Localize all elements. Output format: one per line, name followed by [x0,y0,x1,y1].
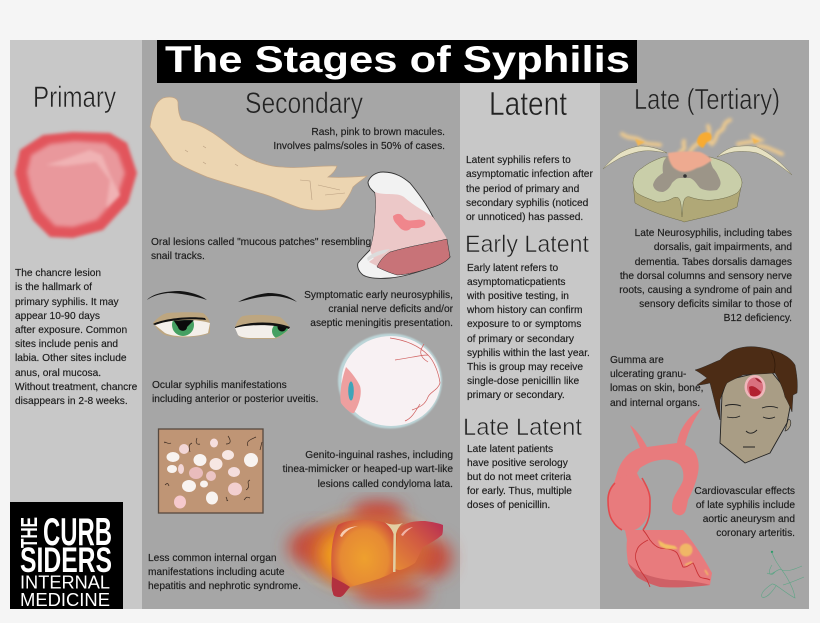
icon: aorta and heart [608,408,712,587]
text: chancre description: Without treatment, chancre [15,382,138,393]
panel: primary background [10,40,142,609]
text: early latent description: asymptomaticpatients [467,277,566,288]
text: chancre description: labia. Other sites include [15,353,127,364]
text: internal organ manifestations: hepatitis and nephrotic syndrome. [148,581,301,592]
text: chancre description [15,268,138,407]
logo: The Curb Siders Internal Medicine: THE [16,517,42,548]
icon: spinal cord with tabes dorsalis [603,120,792,222]
icon: eyes with palsy [147,291,297,339]
text: internal organ manifestations: manifestations including acute [148,567,285,578]
text: genito-inguinal rashes: tinea-mimicker or heaped-up wart-like [283,464,453,475]
text: late neurosyphilis: sensory deficits similar to those of [639,299,792,310]
text: early latent description: single-dose penicillin like [467,376,579,387]
text: late neurosyphilis: dorsalis, gait impairments, and [654,242,792,253]
text: genito-inguinal rashes: Genito-inguinal rashes, including [305,450,453,461]
text: rash: Involves palms/soles in 50% of cases. [273,141,445,152]
text: chancre description: anus, oral mucosa. [15,368,101,379]
text: late neurosyphilis: the dorsal columns and sensory nerve [620,271,792,282]
text: rash: Rash, pink to brown macules. [311,127,445,138]
logo: The Curb Siders Internal Medicine: INTERNAL [20,572,110,592]
text: oral lesions: Oral lesions called "mucous patches" resembling [151,237,371,248]
text: genito-inguinal rashes: lesions called condyloma lata. [318,479,453,490]
right eye [235,315,290,339]
text: latent description: the period of primary and [466,184,580,195]
text: early latent description [466,263,590,401]
text: chancre description: appear 10-90 days [15,311,100,322]
text: late neurosyphilis: B12 deficiency. [724,313,792,324]
heading: early latent: Early Latent [465,231,589,258]
panel: secondary background [142,40,460,609]
left eye [153,312,210,337]
text: genito-inguinal rashes [283,450,453,490]
text: chancre description: is the hallmark of [15,282,92,293]
text: ocular syphilis: Ocular syphilis manifestations [152,380,287,391]
text: gumma [610,355,703,409]
title: The Stages of Syphilis [165,39,630,80]
icon: chancre lesion [15,132,137,238]
logo: The Curb Siders Internal Medicine: CURB [43,511,112,554]
text: early latent description: syphilis within the last year. [467,348,590,359]
text: latent description: asymptomatic infection after [466,169,593,180]
heading: latent: Latent [489,85,567,122]
text: early latent description: This is group may receive [467,362,583,373]
text: internal organ manifestations [148,553,301,592]
text: early latent description: Early latent refers to [467,263,558,274]
text: internal organ manifestations: Less common internal organ [148,553,277,564]
logo: The Curb Siders Internal Medicine: MEDICINE [20,590,110,610]
text: gumma: and internal organs. [610,398,700,409]
text: latent description: secondary syphilis (noticed [466,198,589,209]
text: late neurosyphilis: Late Neurosyphilis, including tabes [635,228,792,239]
text: late neurosyphilis: dementia. Tabes dorsalis damages [635,257,792,268]
heading: late latent: Late Latent [463,414,582,441]
text: gumma: ulcerating granu- [610,369,686,380]
text: neurosyphilis: aseptic meningitis presentation. [310,318,453,329]
text: ocular syphilis: including anterior or posterior uveitis. [152,394,318,405]
text: late neurosyphilis [619,228,792,324]
text: cardiovascular effects: of late syphilis include [696,500,795,511]
text: gumma: lomas on skin, bone, [610,383,703,394]
text: chancre description: The chancre lesion [15,268,101,279]
text: early latent description: whom history can confirm [466,305,582,316]
logo: The Curb Siders Internal Medicine: SIDERS [20,541,112,580]
text: neurosyphilis: Symptomatic early neurosyphilis, [304,290,453,301]
panel: late tertiary background [600,40,809,609]
heading: secondary: Secondary [245,87,363,120]
signature [762,551,804,598]
text: late latent description [467,444,572,511]
text: chancre description: after exposure. Common [15,325,127,336]
text: latent description: or unnoticed) has passed. [466,212,583,223]
text: cardiovascular effects: Cardiovascular effects [694,486,795,497]
text: chancre description: sites include penis and [15,339,118,350]
icon: skin with condyloma lata [158,429,263,513]
text: ocular syphilis [152,380,318,405]
text: oral lesions: snail tracks. [151,251,205,262]
text: early latent description: with positive testing, in [466,291,569,302]
text: latent description [466,155,593,223]
text: cardiovascular effects [694,486,795,539]
logo: The Curb Siders Internal Medicine [10,502,123,610]
text: late latent description: for early. Thus, multiple [467,486,572,497]
text: cardiovascular effects: aortic aneurysm and [703,514,795,525]
text: late latent description: Late latent patients [467,444,553,455]
text: neurosyphilis: cranial nerve deficits and/or [328,304,454,315]
text: chancre description: disappears in 2-8 weeks. [15,396,128,407]
text: latent description: Latent syphilis refers to [466,155,571,166]
text: rash [273,127,445,152]
text: chancre description: primary syphilis. It may [15,297,119,308]
heading: primary: Primary [33,81,116,114]
icon: head with gumma [695,347,797,463]
text: late latent description: doses of penicillin. [467,500,550,511]
panel: latent background [460,40,600,609]
icon: eyeball with uveitis [338,334,442,428]
text: early latent description: of primary or secondary [467,334,575,345]
text: early latent description: primary or secondary. [467,390,565,401]
icon: arm with rash [150,97,367,210]
icon: oral mucous patches [358,172,450,278]
text: late latent description: but do not meet criteria [467,472,572,483]
text: cardiovascular effects: coronary arteritis. [716,528,795,539]
icon: inflamed liver [288,501,452,602]
text: late neurosyphilis: roots, causing a syndrome of pain and [619,285,792,296]
heading: late tertiary: Late (Tertiary) [634,84,780,116]
text: oral lesions [151,237,371,262]
text: early latent description: exposure to or symptoms [467,319,581,330]
text: late latent description: have positive serology [467,458,569,469]
text: gumma: Gumma are [610,355,664,366]
text: neurosyphilis [304,290,454,329]
